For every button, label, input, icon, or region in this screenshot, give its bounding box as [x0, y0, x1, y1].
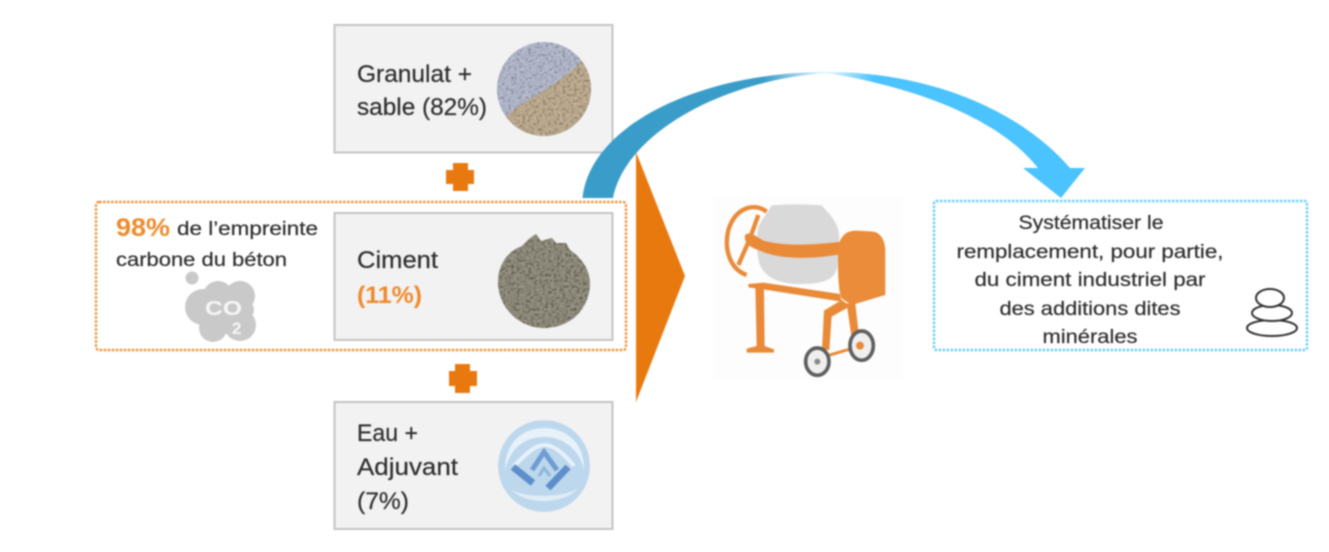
icon: CO2 cloud: 2: [232, 319, 241, 338]
icon: gravel and sand disc: [497, 42, 595, 140]
carbon footprint text: [116, 214, 318, 271]
label: granulat + sable: sable (82%): [357, 94, 487, 121]
recommendation text: [956, 213, 1224, 348]
band: [745, 233, 842, 258]
icon: CO2 cloud: CO: [205, 298, 242, 320]
label: granulat + sable: [357, 61, 487, 121]
panel: eau + adjuvant: [334, 402, 612, 529]
label: eau + adjuvant: Adjuvant: [357, 454, 458, 481]
icon: CO2 cloud: [185, 272, 256, 342]
drum: [757, 204, 839, 284]
icon: water drop disc: [498, 420, 590, 512]
icon: plus 2: [449, 364, 477, 393]
label: ciment: (11%): [357, 282, 422, 309]
icon: plus 1: [446, 163, 474, 191]
recommendation text: des additions dites: [1000, 299, 1180, 320]
label: ciment: Ciment: [357, 247, 438, 274]
recommendation text: remplacement, pour partie,: [956, 242, 1224, 263]
panel: recommendation: [934, 201, 1307, 350]
recommendation text: du ciment industriel par: [974, 270, 1206, 291]
icon: cement mixer: [713, 195, 903, 382]
label: eau + adjuvant: (7%): [357, 488, 409, 515]
label: eau + adjuvant: [357, 420, 458, 515]
panel: granulat + sable: [334, 25, 612, 152]
label: eau + adjuvant: Eau +: [357, 420, 418, 447]
label: ciment: [357, 247, 438, 309]
carbon footprint text: 98%: [116, 214, 170, 242]
motor housing: [838, 231, 885, 305]
wheels: [806, 348, 829, 375]
carbon footprint text: carbone du béton: [116, 250, 287, 271]
arrow: large orange triangle: [636, 152, 685, 402]
frame: [748, 283, 842, 302]
icon: cement powder: [495, 230, 593, 330]
recommendation text: Systématiser le: [1018, 213, 1164, 234]
icon: stacked stones: [1247, 289, 1297, 336]
label: granulat + sable: Granulat +: [357, 61, 472, 88]
panel: ciment: [334, 213, 612, 340]
panel: ciment carbon footprint: [96, 72, 1307, 529]
recommendation text: minérales: [1042, 327, 1138, 348]
handwheel: [727, 207, 767, 275]
carbon footprint text: de l’empreinte: [177, 219, 318, 240]
arrow: curved blue arrow: [582, 72, 1085, 198]
